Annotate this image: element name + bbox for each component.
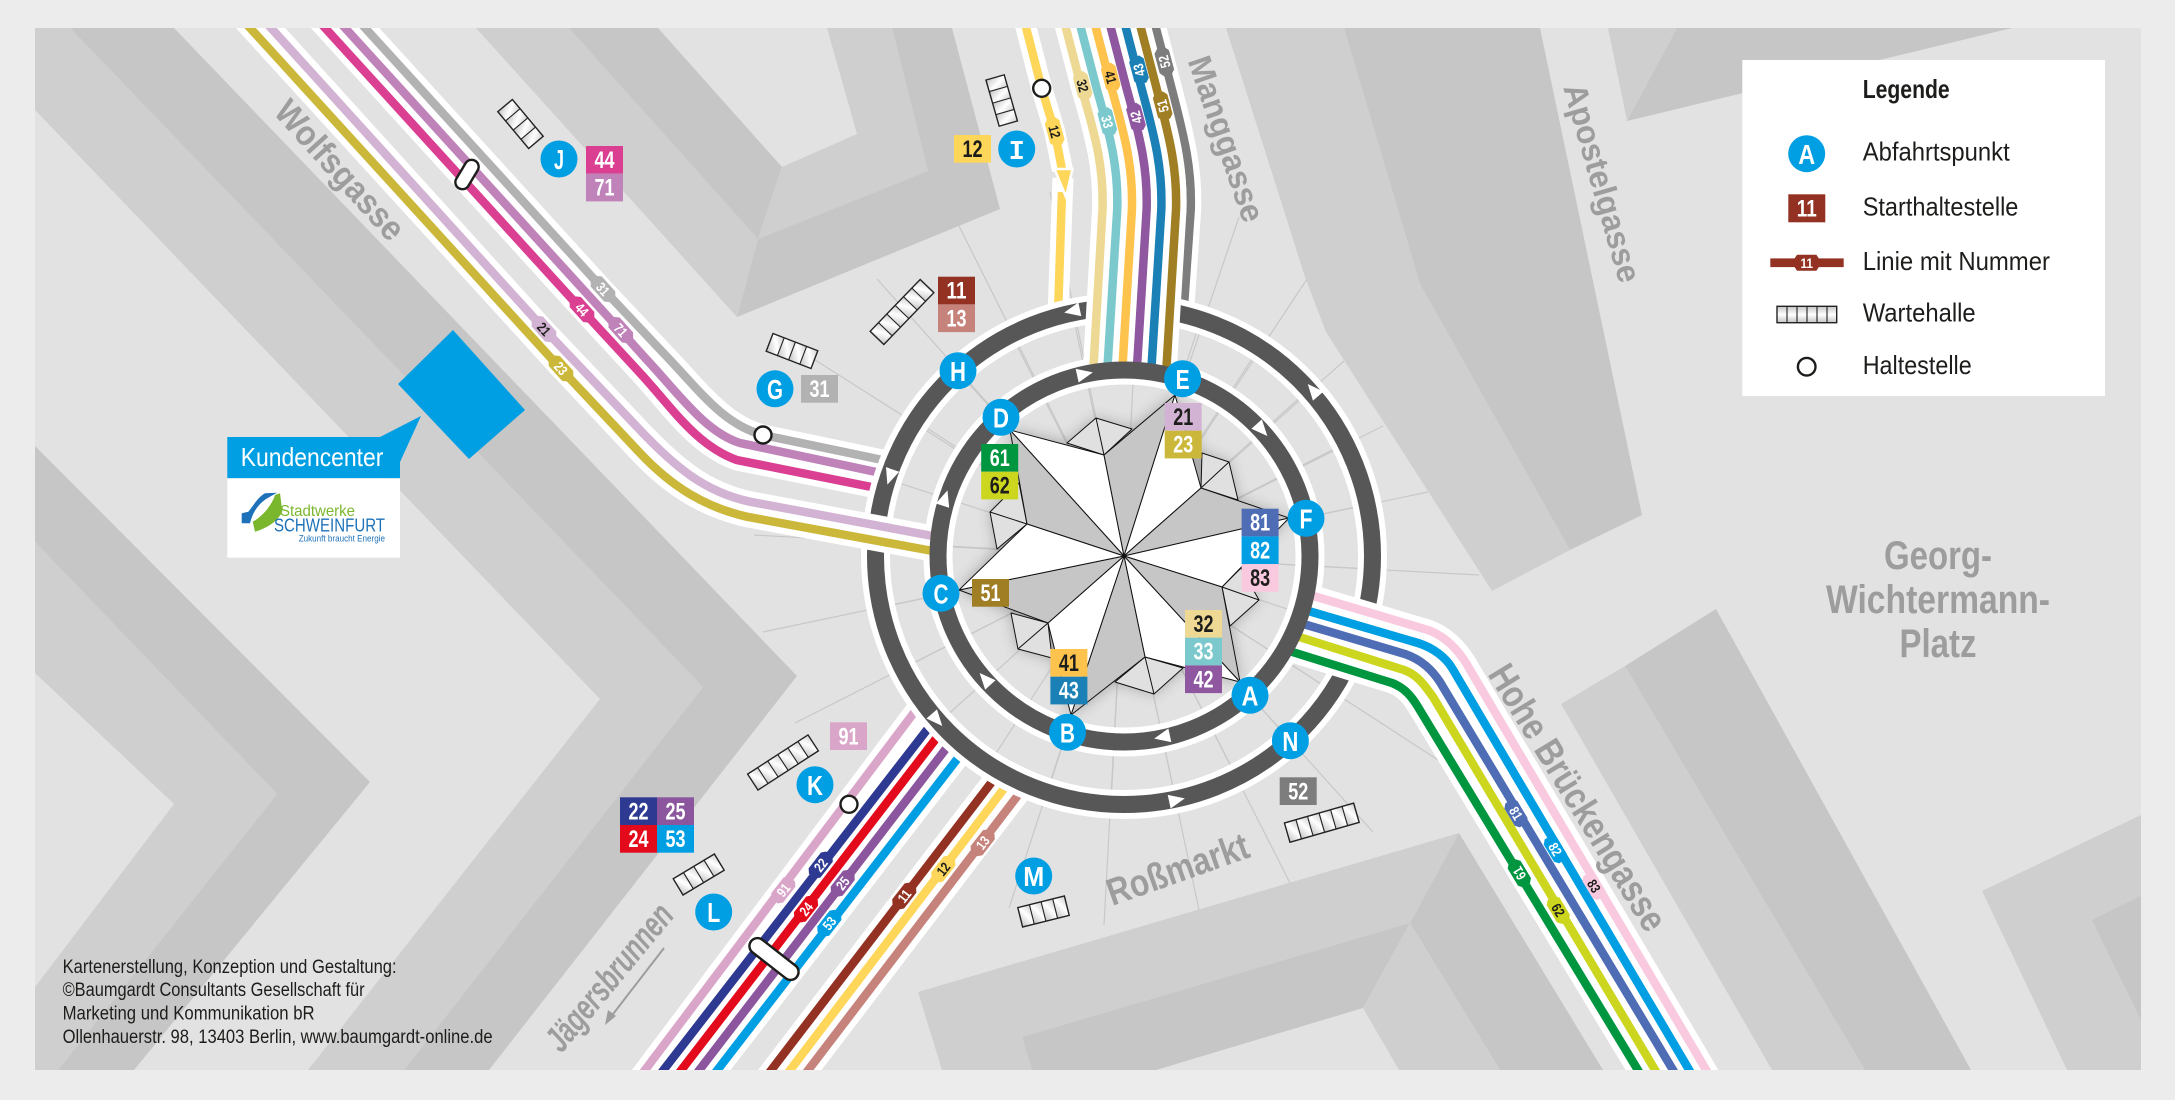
- departure point badges: D: [993, 402, 1009, 434]
- departure point badges: I: [1009, 138, 1025, 168]
- line number tags: 11: [894, 886, 915, 906]
- legend: Wartehalle: [1776, 302, 1975, 324]
- line number tags: 41: [1101, 69, 1120, 86]
- legend: Haltestelle: Haltestelle: [1863, 350, 1972, 380]
- logo: Stadtwerke Schweinfurt: Stadtwerke: [280, 503, 355, 520]
- legend: Starthaltestelle: [1788, 192, 2018, 222]
- start stop squares: 11: [946, 278, 966, 305]
- street names: Hohe Brückengasse: [1479, 657, 1675, 939]
- start stop squares: 53: [666, 826, 686, 853]
- start stop squares: 82: [1250, 537, 1270, 564]
- legend: Linie mit Nummer: [1770, 251, 2050, 271]
- start stop squares: 41: [1059, 650, 1079, 677]
- start stop squares: 13: [946, 305, 966, 332]
- line number tags: 81: [1506, 804, 1526, 823]
- street names: Roßmarkt: [1101, 825, 1255, 914]
- line number tags: 21: [534, 319, 554, 339]
- legend: Abfahrtspunkt: [1788, 135, 2010, 172]
- start stop squares: 51: [980, 580, 1000, 607]
- street names: Platz: [1900, 622, 1976, 666]
- start stop squares: 52: [1288, 778, 1308, 805]
- street names: Jägersbrunnen: [536, 895, 682, 1059]
- departure point badges: E: [1176, 364, 1190, 395]
- departure point badges: L: [707, 897, 720, 928]
- street names: [267, 51, 2050, 1059]
- line number tags: 91: [773, 880, 794, 900]
- credits text: [63, 957, 493, 1048]
- line number tags: 24: [796, 899, 816, 919]
- line number tags: 12: [1045, 124, 1064, 140]
- legend: Wartehalle: Wartehalle: [1863, 298, 1976, 328]
- departure point badges: C: [934, 578, 948, 610]
- credits text: ©Baumgardt Consultants Gesellschaft für: [63, 980, 365, 1001]
- legend: Starthaltestelle: Starthaltestelle: [1863, 192, 2018, 222]
- line number tags: 22: [811, 855, 831, 875]
- start stop squares: 43: [1059, 678, 1079, 705]
- credits text: Kartenerstellung, Konzeption und Gestaltung:: [63, 957, 397, 978]
- legend: Abfahrtspunkt: Abfahrtspunkt: [1863, 137, 2010, 167]
- start stop squares: 91: [838, 723, 858, 750]
- inner ring: [938, 370, 1310, 742]
- line number tags: 62: [1548, 901, 1568, 920]
- line number tags: 23: [551, 358, 571, 379]
- start stop squares: 21: [1173, 404, 1193, 431]
- departure point badges: H: [950, 356, 966, 387]
- line number tags: 52: [1155, 53, 1174, 70]
- street names: Wichtermann-: [1826, 578, 2050, 622]
- lines crossing to the inner ring: [231, 7, 1718, 1090]
- legend: Starthaltestelle: 11: [1797, 196, 1817, 222]
- start stop squares: 25: [666, 798, 686, 825]
- legend: Linie mit Nummer: Linie mit Nummer: [1863, 246, 2050, 276]
- compass star: [959, 395, 1289, 715]
- radial pavement lines: [754, 192, 1479, 925]
- departure point badges: M: [1023, 861, 1044, 892]
- start stop squares: 24: [628, 826, 649, 853]
- start stop squares: [586, 135, 1317, 853]
- logo: Stadtwerke Schweinfurt: Zukunft braucht Energie: [299, 534, 385, 545]
- start stop squares: 62: [990, 473, 1010, 500]
- start stop squares: 44: [594, 147, 615, 174]
- start stop squares: 33: [1194, 639, 1214, 666]
- departure point badges: [540, 130, 1324, 930]
- start stop squares: 12: [962, 136, 982, 163]
- line number tags: 44: [572, 300, 592, 320]
- waiting shelters: [498, 75, 1359, 927]
- line number tags: 61: [1509, 864, 1529, 883]
- logo: Stadtwerke Schweinfurt: [242, 493, 385, 545]
- legend: Linie mit Nummer: 11: [1800, 255, 1813, 271]
- lines ending at the outer ring: [306, 7, 1191, 1090]
- line number tags: 82: [1545, 840, 1565, 859]
- arrow: Jägersbrunnen direction: [605, 948, 664, 1025]
- start stop squares: 81: [1250, 510, 1270, 537]
- line number tags: 31: [593, 279, 613, 299]
- street names: Apostelgasse: [1556, 79, 1649, 286]
- street names: Manggasse: [1181, 51, 1272, 227]
- line number tags: 51: [1153, 98, 1172, 114]
- start stop squares: 61: [990, 445, 1010, 472]
- line number tags: 83: [1584, 877, 1604, 896]
- building: Kundencenter: [398, 330, 525, 459]
- outer ring: [876, 308, 1372, 804]
- departure point badges: K: [807, 770, 823, 801]
- legend heading: Legende: [1863, 74, 1950, 104]
- departure point badges: B: [1060, 718, 1075, 748]
- start stop squares: 42: [1194, 666, 1214, 693]
- line number tags: 32: [1073, 78, 1092, 94]
- start stop squares: 83: [1250, 565, 1270, 592]
- inner ring casing: [938, 370, 1310, 742]
- start stop squares: 31: [810, 376, 830, 403]
- departure point badges: N: [1282, 726, 1298, 757]
- start stop squares: 23: [1173, 432, 1193, 459]
- start stop squares: 32: [1194, 611, 1214, 638]
- departure point badges: J: [554, 144, 564, 175]
- line number tags: 71: [611, 320, 631, 340]
- stops: [453, 80, 1050, 983]
- line number tags: 25: [833, 873, 853, 893]
- legend: Abfahrtspunkt: A: [1798, 139, 1815, 170]
- Kundencenter callout: [227, 416, 421, 558]
- line number tags: 53: [819, 913, 840, 933]
- ring direction arrows: [881, 302, 1324, 809]
- line number tags: 12: [933, 859, 954, 879]
- line number tags: 13: [973, 833, 993, 853]
- legend panel: [1742, 60, 2105, 396]
- departure point badges: F: [1300, 504, 1312, 534]
- street names: Georg-: [1884, 534, 1992, 578]
- street names: Wolfsgasse: [267, 92, 413, 248]
- credits text: Ollenhauerstr. 98, 13403 Berlin, www.baumgardt-online.de: [63, 1027, 493, 1048]
- line number tags: 42: [1127, 109, 1145, 125]
- line number tags: 43: [1130, 62, 1148, 78]
- credits text: Marketing und Kommunikation bR: [63, 1004, 315, 1024]
- logo: Stadtwerke Schweinfurt: SCHWEINFURT: [274, 516, 385, 536]
- start stop squares: 22: [628, 798, 648, 825]
- line number tags: 33: [1098, 114, 1117, 130]
- line number tags: [529, 46, 1608, 939]
- legend: Haltestelle: [1796, 355, 1971, 377]
- start stop squares: 71: [594, 175, 614, 202]
- departure point badges: A: [1242, 680, 1258, 712]
- Kundencenter callout: Kundencenter: [241, 442, 384, 472]
- departure point badges: G: [767, 374, 783, 405]
